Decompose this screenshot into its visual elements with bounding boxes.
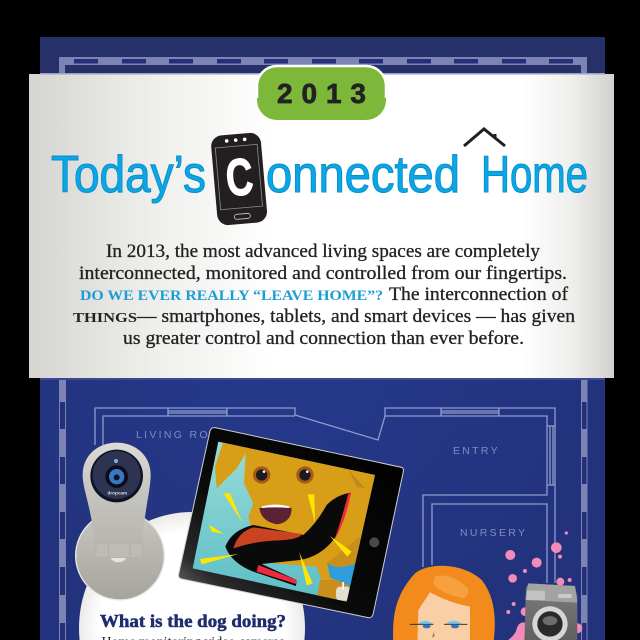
header band (29, 73, 614, 380)
woman hair (393, 566, 495, 640)
motion bursts (200, 493, 352, 586)
year: 2013 (277, 78, 366, 109)
intro text: DO WE EVER REALLY “LEAVE HOME”? (80, 288, 383, 304)
dog collar (327, 563, 356, 586)
intro text: In 2013, the most advanced living spaces are completely (106, 242, 541, 262)
icon: smartphone C: C (224, 148, 255, 208)
dog tag (336, 587, 351, 601)
tablet with dog (178, 428, 403, 618)
title: onnected (266, 146, 460, 204)
blueprint left dashed wall (59, 378, 66, 640)
room label: nursery: NURSERY (460, 527, 527, 539)
tablet screen (192, 442, 375, 602)
title (51, 146, 588, 204)
blueprint right dashed wall (581, 378, 588, 640)
callout heading: What is the dog doing? (100, 611, 286, 631)
floor plan lines (95, 408, 555, 583)
intro text: The interconnection of (389, 285, 569, 305)
icon: security camera: dropcam (107, 490, 127, 495)
washing machine (524, 583, 577, 640)
title: Today’s (51, 146, 206, 204)
woman face (417, 592, 470, 640)
title: Home (481, 146, 588, 204)
room label: entry: ENTRY (453, 445, 500, 457)
icon: roof (464, 129, 505, 146)
bubbles (505, 531, 582, 640)
room label: living room: LIVING RO (136, 429, 210, 441)
woman eyes (417, 621, 463, 624)
tablet frame (178, 428, 403, 618)
intro text: interconnected, monitored and controlled from our fingertips. (79, 264, 567, 284)
icon: security camera (76, 443, 164, 600)
dog eyes (253, 466, 270, 484)
dog head (244, 448, 375, 580)
dog ear (215, 442, 250, 488)
intro text (73, 242, 575, 349)
year badge (257, 66, 386, 120)
shoe in mouth (225, 493, 351, 586)
intro text: — smartphones, tablets, and smart devices — has given (136, 307, 575, 327)
dog nose (259, 505, 292, 524)
intro text: us greater control and connection than ever before. (123, 329, 524, 349)
woman (393, 566, 495, 640)
callout bubble: dog monitoring (79, 512, 305, 640)
intro text: THINGS (73, 311, 137, 326)
blueprint top dashed wall (59, 57, 587, 77)
icon: smartphone C (210, 132, 268, 226)
